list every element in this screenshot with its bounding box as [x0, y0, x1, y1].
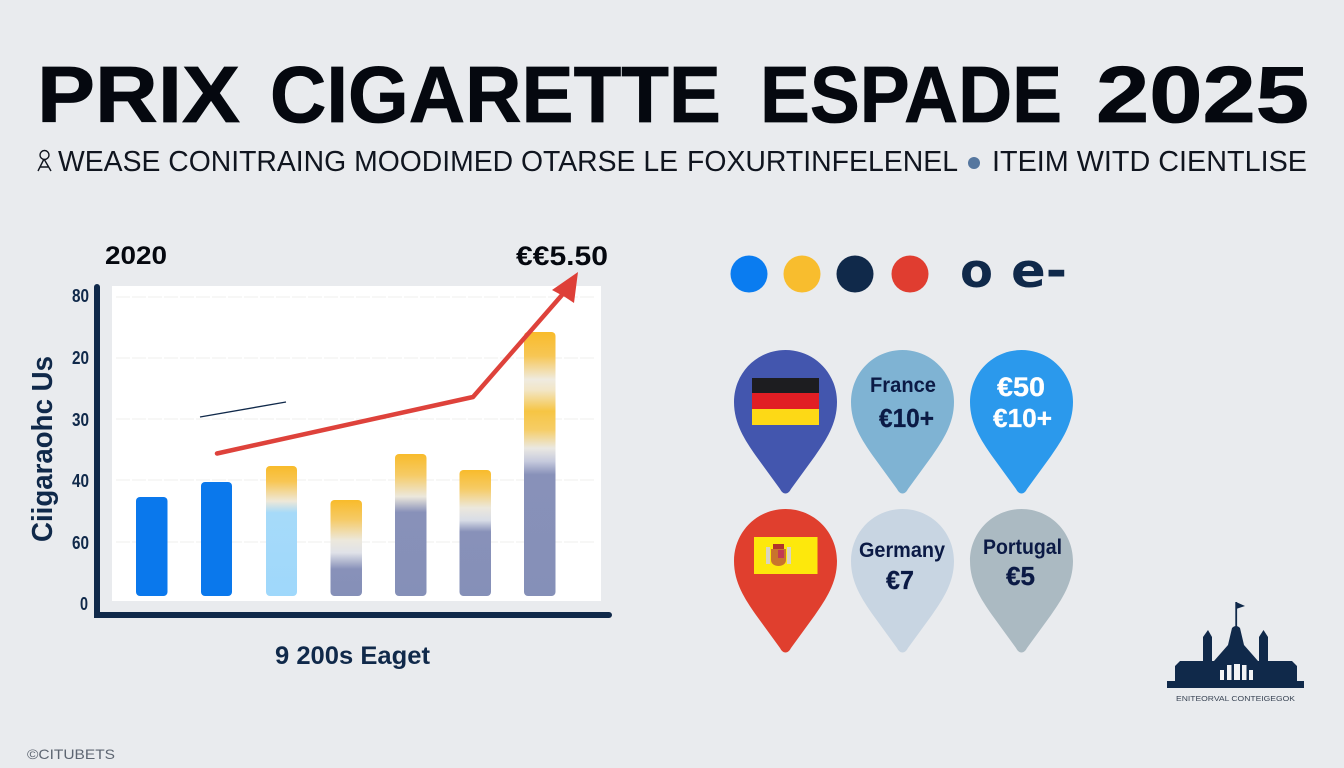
pin: Portugal: €5	[1006, 561, 1035, 591]
pin: blue price	[970, 350, 1073, 494]
axes	[97, 287, 609, 615]
y-axis tick labels: 20	[72, 348, 89, 368]
legend: o	[960, 244, 993, 299]
pin: Germany: €7	[886, 565, 914, 595]
title: CIGARETTE	[270, 50, 721, 139]
title	[37, 50, 1309, 139]
thin annotation line	[200, 402, 286, 417]
x-axis title: 9 200s Eaget	[275, 642, 431, 670]
y-axis tick labels: 40	[72, 471, 89, 491]
y-axis tick labels: 60	[72, 533, 89, 553]
chart plot area	[112, 286, 601, 601]
y-axis tick labels: 80	[72, 286, 89, 306]
bars	[136, 332, 556, 596]
pin: Germany	[851, 509, 954, 652]
pin: Germany: Germany	[859, 539, 945, 562]
footer credit: ©CITUBETS	[27, 746, 115, 762]
subtitle: ITEIM WITD CIENTLISE	[992, 146, 1307, 178]
subtitle: FOXURTINFELENEL	[687, 146, 958, 178]
title: 2025	[1096, 50, 1309, 139]
pin: Portugal	[970, 509, 1073, 652]
pin: France: France	[870, 374, 936, 397]
legend	[730, 244, 1067, 299]
title: PRIX	[37, 50, 240, 139]
subtitle	[38, 146, 1307, 178]
icon: flag of Spain	[754, 537, 818, 574]
pin: blue price: €10+	[993, 403, 1052, 433]
icon: institution building logo	[1167, 602, 1304, 703]
pin: blue price: €50	[997, 372, 1045, 402]
subtitle: WEASE CONITRAING MOODIMED OTARSE LE	[58, 146, 678, 178]
y-axis tick labels	[72, 286, 89, 614]
pin: Portugal: Portugal	[983, 536, 1062, 559]
logo caption: ENITEORVAL CONTEIGEGOK	[1176, 694, 1295, 703]
y-axis tick labels: 0	[80, 594, 88, 614]
pin: France	[851, 350, 954, 494]
arrow: red trend line	[217, 272, 578, 454]
pin: France: €10+	[879, 403, 934, 433]
icon: subtitle figure	[38, 150, 51, 171]
end price label: €€5.50	[516, 241, 608, 271]
y-axis title: Ciigaraohc Us	[27, 356, 59, 542]
bar chart	[27, 241, 609, 670]
icon: flag of Germany	[752, 378, 819, 425]
pin: Spanish flag	[734, 509, 837, 652]
panel: country pins	[734, 350, 1073, 652]
y-axis tick labels: 30	[72, 410, 89, 430]
title: ESPADE	[760, 50, 1062, 139]
legend: e-	[1011, 244, 1067, 299]
pin: German flag	[734, 350, 837, 494]
start year label: 2020	[105, 242, 167, 270]
